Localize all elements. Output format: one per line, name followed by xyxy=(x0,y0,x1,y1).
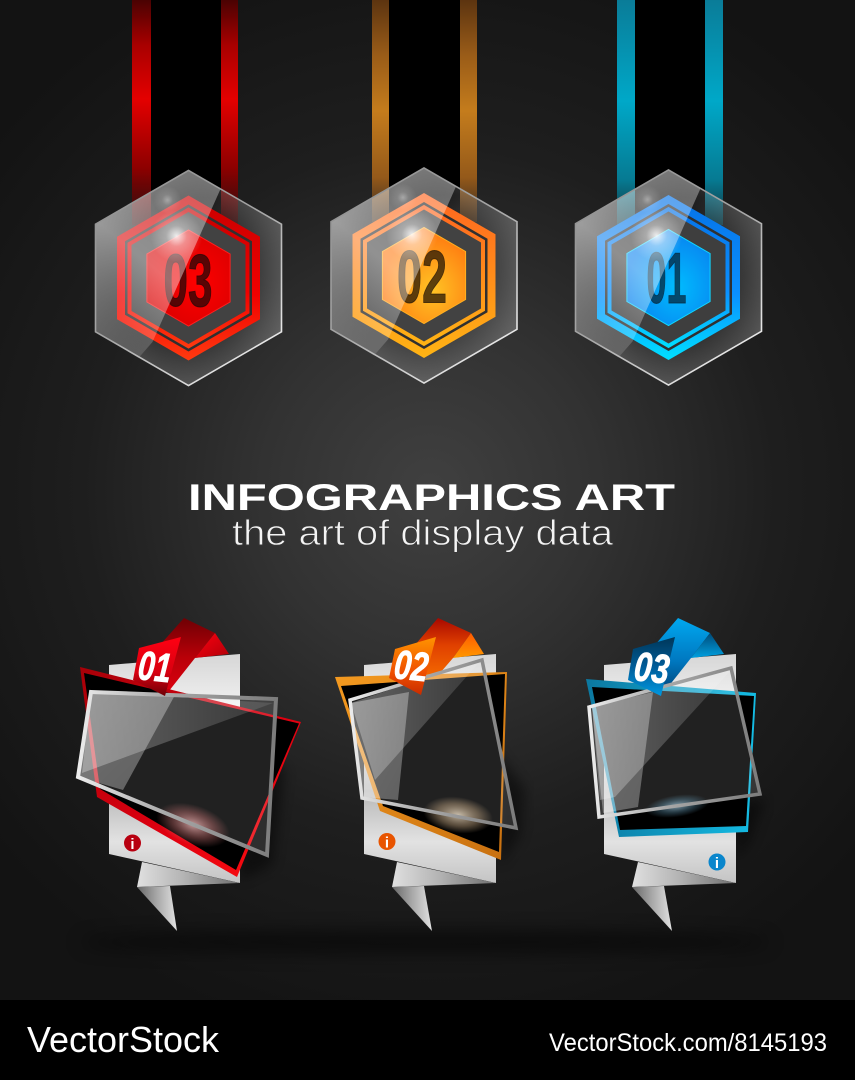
title: INFOGRAPHICS ART xyxy=(188,477,676,518)
info icon: i xyxy=(130,836,135,853)
glass frame xyxy=(589,668,760,821)
paper fold xyxy=(392,862,496,887)
footer url: VectorStock.com/8145193 xyxy=(549,1029,827,1057)
hexagon badge: 02 orange xyxy=(331,168,517,383)
info icon xyxy=(378,833,396,852)
panel: origami card 03 blue xyxy=(586,618,765,931)
info icon: i xyxy=(715,855,719,872)
info icon xyxy=(124,834,141,853)
number 02: 02 xyxy=(397,236,447,318)
info icon xyxy=(708,854,726,872)
ribbon: orange xyxy=(372,0,477,222)
panel: origami card 01 red xyxy=(78,618,301,931)
colored frame xyxy=(80,667,301,877)
panel: origami card 02 orange xyxy=(335,618,525,931)
number 03: 03 xyxy=(164,239,212,322)
glass glare xyxy=(576,170,700,358)
footer brand: VectorStock xyxy=(27,1019,220,1060)
number tag: 03 xyxy=(632,643,672,693)
glass frame xyxy=(350,658,516,838)
card shadow xyxy=(496,750,525,865)
back ribbon xyxy=(415,618,484,695)
back ribbon xyxy=(160,618,229,696)
ribbon: red xyxy=(132,0,238,225)
paper body xyxy=(109,654,240,883)
glass glare xyxy=(96,170,220,358)
colored frame xyxy=(586,679,756,837)
footer bar xyxy=(0,1000,855,1080)
paper tail xyxy=(392,886,432,931)
ribbon: blue xyxy=(617,0,723,225)
glass glare xyxy=(331,168,456,356)
subtitle: the art of display data xyxy=(232,512,614,553)
number tag: 02 xyxy=(392,641,431,691)
number tag xyxy=(628,637,675,696)
hexagon badge: 01 blue xyxy=(576,170,762,385)
hexagon badge: 03 red xyxy=(96,170,282,386)
number tag: 01 xyxy=(136,642,174,691)
card shadow xyxy=(736,800,765,860)
back ribbon xyxy=(655,618,724,696)
paper fold xyxy=(137,862,240,887)
colored frame xyxy=(335,672,507,860)
paper body xyxy=(604,654,736,883)
paper tail xyxy=(137,886,177,931)
info icon: i xyxy=(385,834,389,852)
glass frame xyxy=(78,692,276,856)
paper fold xyxy=(632,862,736,887)
ground shadow xyxy=(80,931,770,953)
card shadow xyxy=(240,740,285,880)
paper tail xyxy=(632,886,672,931)
hexagon badge: 01 blue: 01 xyxy=(646,239,686,319)
paper body xyxy=(364,654,496,883)
